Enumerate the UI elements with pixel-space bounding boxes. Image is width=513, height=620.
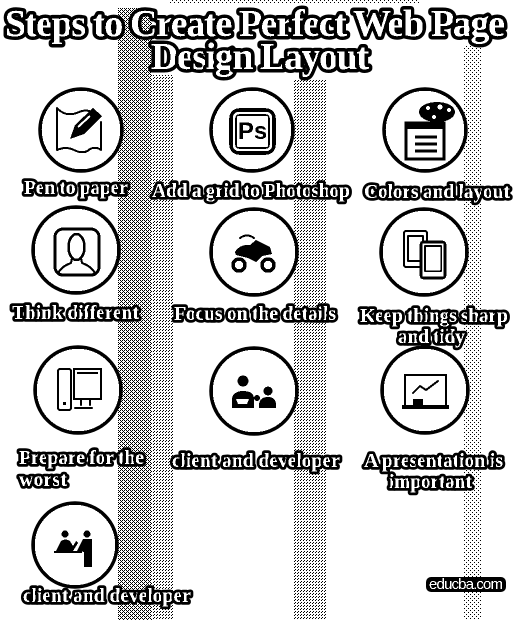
step 6: keep things sharp and tidy: and tidy — [398, 326, 465, 348]
title: Steps to Create Perfect Web Page — [5, 3, 505, 45]
step 7: prepare for the worst — [19, 347, 144, 491]
step 3: colors and layout — [364, 89, 510, 203]
circle badge with Ps icon — [211, 89, 293, 171]
brand: educba.com: educba.com — [429, 576, 503, 593]
step 1: pen to paper — [24, 89, 128, 199]
label: client and developer — [23, 585, 191, 607]
circle badge with palette and window icon — [384, 89, 466, 171]
label: client and developer — [172, 450, 340, 472]
step 2: add a grid to Photoshop — [152, 89, 350, 202]
label: A presentation is — [364, 450, 503, 472]
step 9: a presentation is important: important — [389, 471, 472, 493]
label: Add a grid to Photoshop — [152, 180, 350, 202]
step 8: client and developer — [172, 348, 340, 472]
label: Think different — [12, 302, 139, 324]
circle badge with Ps icon: Ps — [238, 118, 267, 145]
circle badge with meeting people icon — [33, 503, 117, 587]
label: Keep things sharp — [360, 305, 508, 327]
step 5: focus on the details — [174, 209, 336, 325]
label: Prepare for the — [19, 447, 144, 469]
step 7: prepare for the worst: worst — [19, 469, 67, 491]
circle badge with motorbike icon — [211, 209, 297, 295]
circle badge with two people icon — [211, 348, 297, 434]
label: Focus on the details — [174, 303, 336, 325]
circle badge with portrait icon — [33, 207, 119, 293]
step 9: a presentation is important — [364, 347, 503, 493]
title: Design Layout — [151, 36, 369, 78]
title — [5, 3, 505, 78]
step 10: client and developer — [23, 503, 191, 607]
circle badge with desktop computer icon — [35, 347, 121, 433]
circle badge with map and pencil icon — [40, 89, 122, 171]
step 6: keep things sharp and tidy — [360, 209, 508, 348]
label: Pen to paper — [24, 177, 128, 199]
label: Colors and layout — [364, 181, 510, 203]
step 4: think different — [12, 207, 139, 324]
circle badge with chart board icon — [382, 347, 468, 433]
circle badge with phone and tablet icon — [381, 209, 467, 295]
